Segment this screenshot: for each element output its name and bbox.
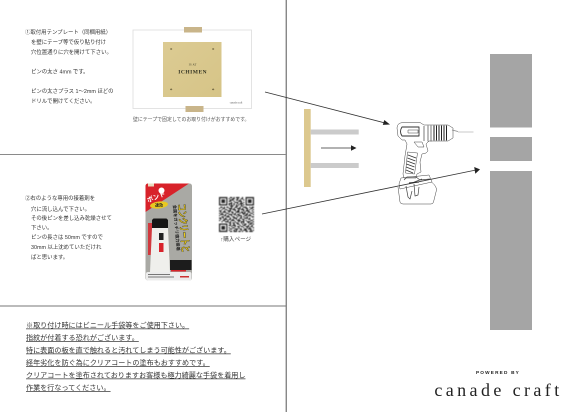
icon: cordless drill	[397, 122, 474, 204]
panel dividers	[0, 0, 286, 412]
arrow: adhesive to pin hole	[262, 167, 480, 214]
caption: QR purchase page: ↑購入ページ	[220, 235, 252, 243]
text block: caution notes: 指紋が付着する恐れがございます。	[26, 333, 139, 342]
wall upper segment	[490, 54, 532, 128]
wood plate	[304, 109, 311, 187]
template illustration: canade craft	[230, 102, 243, 104]
logo: canade craft	[434, 370, 563, 400]
panel: step 1 template	[25, 27, 252, 123]
wall lower segment	[490, 171, 532, 330]
panel: step 2 adhesive	[25, 184, 254, 280]
wall cross-section diagram	[304, 109, 359, 187]
adhesive headline: コンクリートと	[176, 203, 192, 253]
text block: step 2 instructions: ばと思います。	[31, 253, 68, 261]
text block: step 2 instructions: 穴に流し込んで下さい。	[31, 205, 90, 213]
template illustration	[133, 27, 252, 112]
text block: step 1 instructions: ①取付用テンプレート（同梱用紙）	[25, 28, 111, 36]
wall with holes	[490, 54, 532, 330]
text block: caution notes	[26, 320, 245, 392]
adhesive package: 速効	[155, 202, 163, 208]
QR code	[219, 198, 254, 231]
adhesive package: ボンド	[145, 189, 167, 205]
template illustration: IS AT	[189, 64, 197, 66]
panel: cautions	[26, 320, 245, 392]
text block: step 1 instructions: を壁にテープ等で仮り貼り付け	[31, 38, 106, 46]
logo: canade craft: canade craft	[434, 380, 563, 400]
adhesive package: 金属をガッチリ強力接着	[171, 205, 182, 251]
text block: caution notes: クリアコートを塗布されておりますお客様も極力綺麗な手袋を着用し	[26, 370, 245, 380]
pin lower	[311, 163, 359, 168]
text block: step 1 instructions: 穴位置通りに穴を開けて下さい。	[31, 48, 112, 56]
text block: step 2 instructions: 30mm 以上沈めていただけれ	[31, 243, 102, 251]
logo: canade craft: POWERED BY	[476, 370, 520, 375]
pin upper	[311, 130, 359, 134]
text block: caution notes: ※取り付け時にはビニール手袋等をご使用下さい。	[26, 320, 189, 330]
caption: template: 壁にテープで固定してのお取り付けがおすすめです。	[133, 116, 249, 123]
text block: caution notes: 作業を行なってください。	[26, 383, 111, 392]
text block: caution notes: 経年劣化を防ぐ為にクリアコートの塗布もおすすめです。	[26, 358, 210, 367]
text block: step 1 instructions: ピンの太さ 4mm です。	[31, 68, 89, 76]
text block: step 2 instructions	[25, 194, 112, 261]
text block: step 2 instructions: ②右のような専用の接着剤を	[25, 194, 95, 202]
text block: caution notes: 特に表面の板を直で触れると汚れてしまう可能性がございます。	[26, 346, 231, 354]
adhesive package	[145, 184, 192, 280]
text block: step 2 instructions: 下さい。	[31, 224, 53, 232]
text block: step 2 instructions: その後ピンを差し込み乾燥させて	[31, 214, 112, 222]
template illustration: ICHIMEN	[178, 70, 207, 76]
arrow: template to drill	[265, 92, 390, 125]
text block: step 1 instructions	[25, 28, 114, 105]
wall middle segment	[490, 137, 532, 161]
text block: step 1 instructions: ピンの太さプラス 1〜2mm ほどの	[31, 87, 114, 95]
text block: step 2 instructions: ピンの長さは 50mm ですので	[31, 234, 103, 241]
arrow: insert direction	[321, 145, 356, 151]
text block: step 1 instructions: ドリルで開けてください。	[31, 98, 96, 105]
